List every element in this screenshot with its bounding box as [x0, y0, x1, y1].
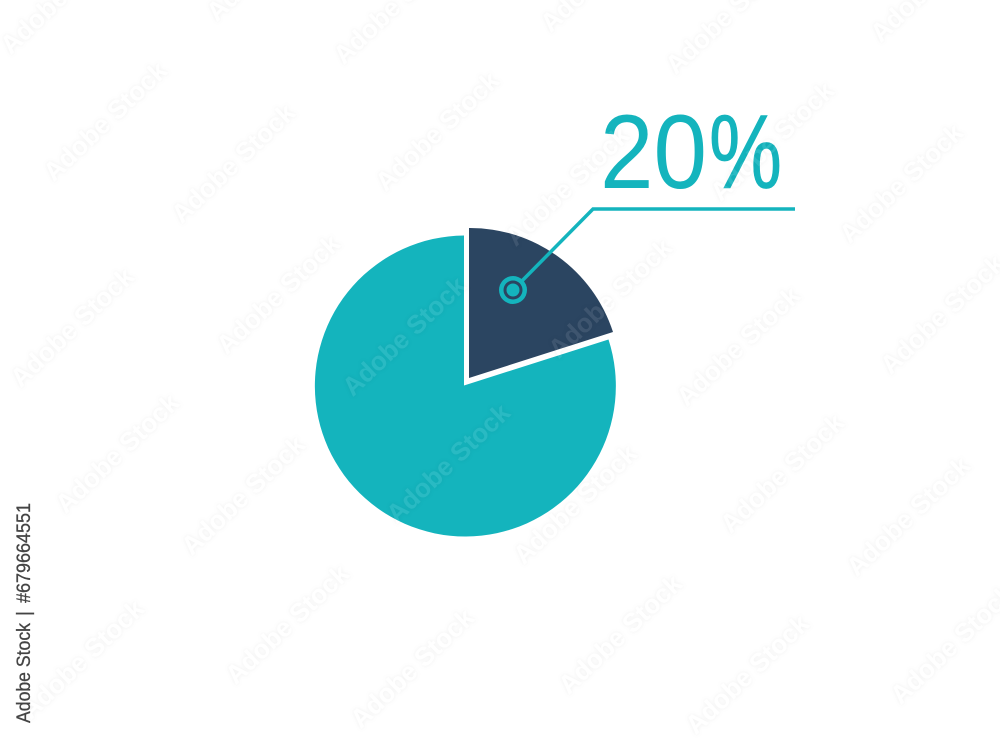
- stock watermark pattern: Adobe Stock: [679, 608, 815, 739]
- stock watermark pattern: Adobe Stock: [670, 280, 806, 412]
- stock watermark pattern: Adobe Stock: [833, 117, 969, 249]
- stock watermark pattern: Adobe Stock: [704, 75, 840, 207]
- percentage label: %: [709, 94, 782, 211]
- percentage label: 20: [600, 94, 707, 211]
- stock watermark pattern: Adobe Stock: [380, 397, 516, 529]
- stock watermark pattern: Adobe Stock: [344, 602, 480, 734]
- stock watermark pattern: Adobe Stock: [840, 450, 976, 582]
- stock watermark pattern: Adobe Stock: [552, 568, 688, 700]
- stock watermark pattern: Adobe Stock: [165, 97, 301, 229]
- icon: callout marker dot: [499, 276, 527, 304]
- stock watermark pattern: Adobe Stock: [507, 438, 643, 570]
- stock watermark pattern: Adobe Stock: [14, 593, 150, 725]
- stock watermark pattern: Adobe Stock: [542, 232, 678, 364]
- stock credit text: #679664551: [14, 503, 35, 603]
- stock credit text: [14, 503, 35, 723]
- stock watermark pattern: Adobe Stock: [175, 429, 311, 561]
- stock watermark pattern: Adobe Stock: [336, 270, 472, 402]
- stock credit text: Adobe Stock: [14, 623, 35, 723]
- stock watermark pattern: Adobe Stock: [714, 407, 850, 539]
- stock credit text: |: [14, 611, 35, 616]
- stock watermark pattern: Adobe Stock: [4, 261, 140, 393]
- stock watermark pattern: Adobe Stock: [219, 558, 355, 690]
- stock watermark pattern: Adobe Stock: [369, 65, 505, 197]
- callout leader line: [513, 209, 795, 290]
- pie slice: remaining 80%: [315, 236, 616, 536]
- stock watermark pattern: Adobe Stock: [210, 228, 346, 360]
- stock watermark pattern: Adobe Stock: [499, 120, 635, 252]
- stock watermark pattern: Adobe Stock: [49, 387, 185, 519]
- percentage label: [600, 94, 782, 211]
- stock watermark pattern: Adobe Stock: [37, 55, 173, 187]
- pie slice: highlighted 20%: [469, 228, 613, 378]
- pie chart: [315, 228, 616, 536]
